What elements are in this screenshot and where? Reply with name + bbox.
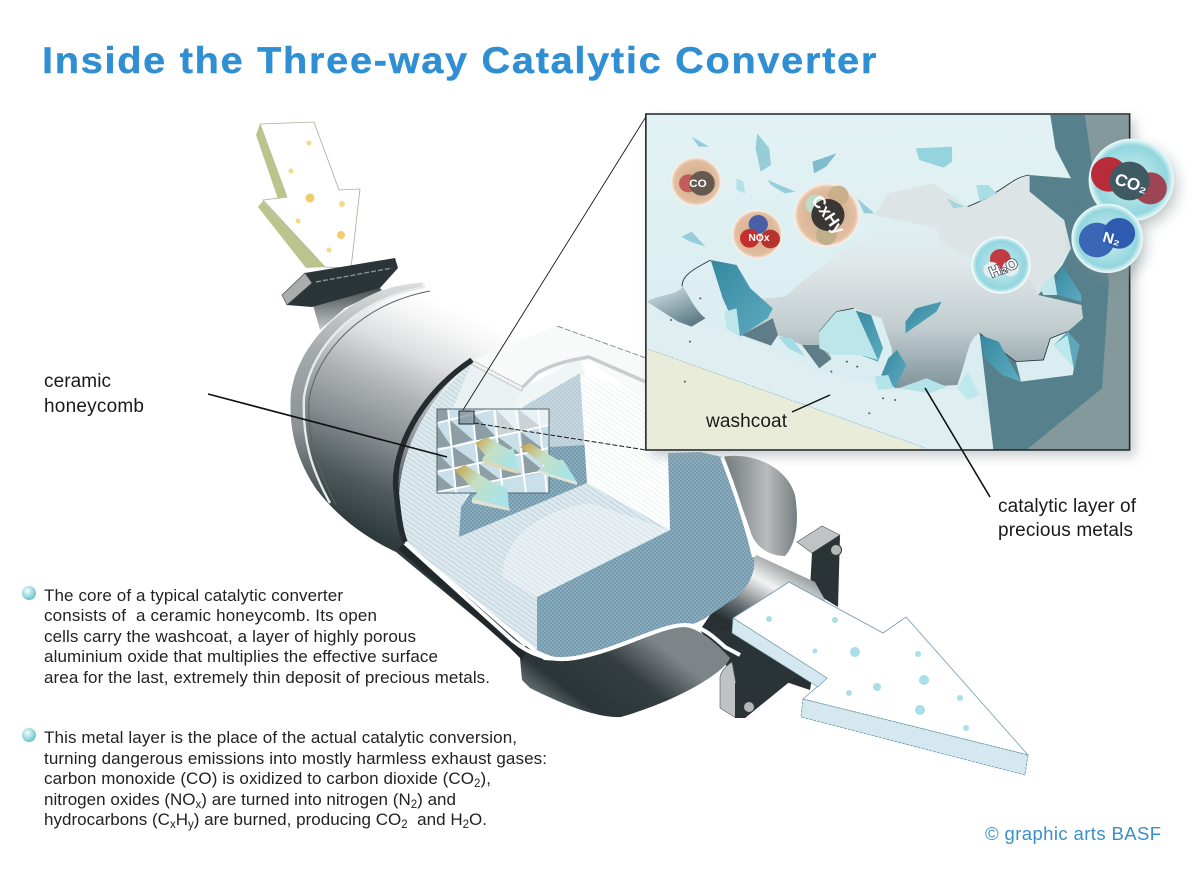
text block: honeycomb description: [44, 586, 490, 687]
text block: conversion description: [44, 728, 547, 831]
text block: conversion description: ) are burned, producing CO: [194, 810, 401, 829]
molecule: N2: [1072, 204, 1142, 272]
text block: honeycomb description: cells carry the washcoat, a layer of highly porous: [44, 627, 416, 646]
molecule: NOx: NOx: [748, 233, 770, 244]
icon: bullet 1: [22, 586, 36, 600]
text block: conversion description: ),: [481, 769, 491, 788]
panel: inset shadow: [651, 120, 1135, 456]
text block: conversion description: H: [176, 810, 188, 829]
dark strip under cut: [398, 543, 526, 660]
icon: bullet 2: [22, 728, 36, 742]
shell cavity pale area: [440, 358, 585, 470]
title: Inside the Three-way Catalytic Converter: [42, 40, 878, 81]
text block: conversion description: 2: [474, 778, 480, 790]
white upper shell: [420, 283, 646, 402]
outer substrate: [1026, 115, 1130, 450]
text block: conversion description: nitrogen oxides (NO: [44, 790, 196, 809]
honeycomb inner wedge: [459, 373, 587, 537]
text block: conversion description: This metal layer is the place of the actual catalytic conversion,: [44, 728, 517, 747]
credit: © graphic arts BASF: [985, 823, 1161, 844]
molecule: CO: [671, 158, 721, 206]
label: catalytic layer of precious metals: precious metals: [998, 520, 1133, 541]
molecule: CO: CO: [689, 178, 707, 190]
honeycomb end face: [537, 452, 754, 659]
text block: honeycomb description: consists of a ceramic honeycomb. Its open: [44, 606, 377, 625]
washcoat base: [646, 348, 926, 450]
text block: conversion description: y: [188, 819, 194, 831]
lower shell: [519, 627, 730, 717]
molecule: NOx: [732, 210, 782, 258]
pale washcoat band: [646, 302, 999, 450]
label: washcoat: [705, 395, 830, 432]
label: catalytic layer of precious metals: catalytic layer of: [998, 496, 1137, 517]
left bracket: [720, 662, 798, 718]
label: ceramic honeycomb: ceramic: [44, 371, 111, 392]
cylinder body: [291, 283, 565, 648]
molecule: CO2: CO₂: [1112, 170, 1150, 197]
dark metal shadow patch: [647, 287, 706, 327]
molecule: CxHy: CxHy: [808, 192, 849, 238]
molecule shadow: [1076, 147, 1176, 278]
text block: conversion description: 2: [411, 799, 417, 811]
panel: catalytic surface inset: [646, 114, 1176, 450]
icon: inlet exhaust arrow: [256, 122, 360, 268]
text block: conversion description: and H: [408, 810, 463, 829]
honeycomb white wall: [580, 373, 670, 530]
text block: conversion description: x: [170, 819, 176, 831]
tail pipe: [700, 553, 825, 690]
neck and inlet flange: [282, 258, 398, 330]
shaded metal patches: [742, 318, 831, 368]
flow arrows in honeycomb: [455, 437, 577, 511]
text block: conversion description: turning dangerous emissions into mostly harmless exhaust gases:: [44, 749, 547, 768]
text block: conversion description: 2: [401, 819, 408, 831]
metal outline: [682, 175, 1068, 362]
text block: honeycomb description: aluminium oxide that multiplies the effective surface: [44, 647, 438, 666]
label line: ceramic honeycomb: [208, 394, 447, 457]
label: ceramic honeycomb: honeycomb: [44, 396, 144, 417]
honeycomb detail window: [437, 409, 549, 493]
cut edge arcs: [396, 357, 646, 542]
zoom connector lines: [463, 115, 647, 450]
right bracket: [797, 526, 842, 607]
text block: conversion description: x: [196, 799, 202, 811]
dark substrate: [980, 115, 1109, 450]
text block: conversion description: hydrocarbons (C: [44, 810, 170, 829]
molecule: N2: N₂: [1101, 229, 1122, 250]
inset frame: [646, 114, 1130, 450]
text block: conversion description: carbon monoxide (CO) is oxidized to carbon dioxide (CO: [44, 769, 474, 788]
converter illustration: [282, 258, 842, 718]
text block: conversion description: O.: [469, 810, 487, 829]
back end cap: [722, 456, 797, 556]
label: washcoat: washcoat: [705, 411, 788, 432]
molecule: CO2: [1089, 139, 1173, 221]
icon: outlet exhaust arrow: [732, 582, 1028, 775]
upper grey metal layer: [874, 175, 1071, 295]
text block: honeycomb description: The core of a typical catalytic converter: [44, 586, 343, 605]
grey metal layer: [742, 262, 1083, 388]
collar ring: [291, 283, 430, 505]
honeycomb striped side: [399, 362, 537, 650]
white rim lines: [405, 457, 754, 659]
molecule: CxHy: [794, 184, 859, 246]
text block: conversion description: ) and: [417, 790, 456, 809]
text block: conversion description: 2: [463, 819, 469, 831]
label line: catalytic layer: [925, 388, 990, 497]
text block: conversion description: ) are turned into nitrogen (N: [201, 790, 411, 809]
honeycomb floor: [459, 483, 670, 597]
molecule: H2O: [972, 237, 1030, 293]
catalytic flakes: [681, 133, 1081, 400]
text block: honeycomb description: area for the last, extremely thin deposit of precious metals.: [44, 668, 490, 687]
lower dark pipe shadow: [708, 630, 800, 718]
molecule: H2O: H₂O: [987, 255, 1021, 281]
